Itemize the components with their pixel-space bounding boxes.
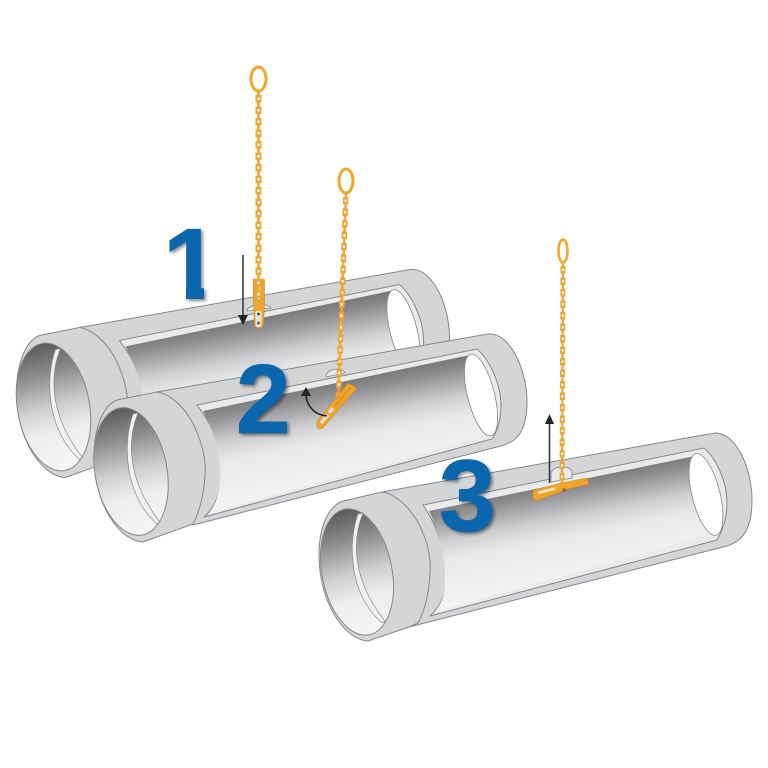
chain and clamp 3	[533, 240, 589, 501]
clamp 1 body	[253, 279, 264, 328]
chain and clamp 1	[251, 67, 266, 328]
pipe 3	[310, 433, 752, 642]
step number 3: 3	[439, 439, 496, 553]
pipe 1	[7, 269, 449, 478]
step number 2: 2	[236, 344, 291, 454]
arrow 2: curved up	[301, 387, 327, 416]
pipe 2	[84, 334, 527, 542]
chain and clamp 2	[317, 169, 357, 429]
arrow 3: up	[545, 414, 554, 483]
slot in pipe 2	[326, 369, 345, 377]
slot in pipe 1	[247, 305, 271, 311]
slot in pipe 3	[551, 467, 572, 482]
illustration: three pipes lifted with chain clamps	[16, 66, 752, 642]
step number 1: 1	[163, 209, 219, 321]
arrow 1: down	[238, 255, 248, 325]
